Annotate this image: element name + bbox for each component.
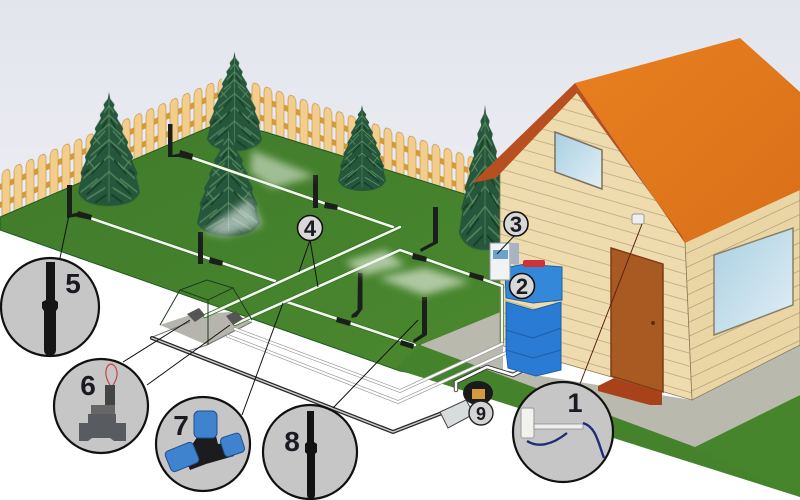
pipe: pump supply <box>152 338 442 432</box>
circle <box>263 405 357 499</box>
sprinkler body <box>42 262 58 356</box>
water tank <box>505 260 562 376</box>
circle <box>1 258 99 356</box>
control display <box>493 250 508 259</box>
tank tier three <box>506 328 561 358</box>
circle <box>156 397 250 491</box>
tree centre <box>197 125 260 236</box>
wall socket <box>632 214 644 224</box>
right cap <box>219 432 246 458</box>
tree behind house <box>459 105 511 250</box>
leader: 6 <box>123 320 230 385</box>
pipe: front lateral <box>90 218 275 281</box>
plate outline <box>150 322 252 352</box>
fitting body <box>184 436 234 470</box>
grass strip along the house <box>395 345 800 497</box>
badge 2: 2 <box>516 274 528 299</box>
lawn <box>0 126 560 400</box>
callout 6: valve <box>54 359 148 453</box>
tank tier four <box>506 348 561 376</box>
sprinklers and couplers <box>67 124 484 349</box>
leader: 8 <box>333 320 418 408</box>
sprinkler: centre <box>198 232 203 264</box>
pipe: main one <box>205 227 400 316</box>
top cap <box>194 411 217 438</box>
spray: right sprinkler <box>378 268 470 295</box>
roof: main plane <box>575 38 800 243</box>
pipe: tank to pump <box>456 367 523 390</box>
leader: 7 <box>242 303 283 415</box>
wire frame <box>160 280 252 345</box>
coupler: right rear <box>412 253 427 262</box>
pump housing <box>463 381 493 405</box>
red wire loop <box>106 364 117 385</box>
coupler: lower right <box>400 340 414 349</box>
door <box>611 248 663 392</box>
valve box base <box>150 312 252 352</box>
door knob <box>651 321 655 325</box>
leader: 4 <box>299 240 318 287</box>
window: side wall <box>714 228 793 335</box>
badge 9: 9 <box>476 404 486 424</box>
outlet box <box>521 408 534 438</box>
coupler: back right <box>324 202 338 210</box>
valves <box>187 308 243 325</box>
leader: 1 <box>580 224 642 384</box>
window: gable <box>555 132 602 189</box>
callout 8: sprinkler <box>263 405 357 499</box>
white tube <box>534 424 583 429</box>
pump <box>440 381 493 428</box>
wooden fence: right <box>250 81 474 202</box>
number: 7 <box>173 410 189 441</box>
leader lines <box>60 215 642 415</box>
sprinkler: back left <box>168 124 182 157</box>
pipe: buried one <box>235 329 502 391</box>
valve body <box>79 414 126 441</box>
water spray <box>203 150 470 295</box>
coupler: lower middle <box>336 317 351 326</box>
left cap <box>164 441 200 473</box>
sprinkler: right rear <box>420 207 438 252</box>
controller box <box>490 243 519 280</box>
tree back corner <box>207 52 262 151</box>
badge 4: 4 <box>304 216 317 241</box>
pump label <box>472 389 485 399</box>
tank tier one <box>505 264 562 303</box>
base plate <box>160 312 252 345</box>
callout 1: water inlet <box>513 382 613 482</box>
solenoid <box>105 385 115 409</box>
sprinkler body <box>305 411 317 499</box>
spray: centre sprinkler <box>203 198 262 236</box>
concrete path <box>420 311 800 447</box>
background: white ground <box>0 225 800 500</box>
background: sky <box>0 0 800 260</box>
badge 2 <box>510 274 534 299</box>
control back panel <box>510 243 519 264</box>
grass: lower right corner <box>690 395 800 497</box>
spray: lawn sprinkler <box>345 250 405 275</box>
sprinkler: left <box>67 185 80 218</box>
number: 8 <box>284 426 300 457</box>
house <box>472 38 800 405</box>
wall: right side <box>685 185 800 400</box>
badge 9 <box>469 401 493 425</box>
pipe: back lateral <box>193 158 393 227</box>
blue hose <box>527 423 604 458</box>
pipe: main two <box>235 250 502 342</box>
callout 5: sprinkler <box>1 258 99 356</box>
tree right <box>338 105 386 191</box>
leader: 5 <box>60 215 69 258</box>
callout 7: T fitting <box>156 397 250 491</box>
tree left <box>78 92 140 206</box>
door step <box>598 378 662 405</box>
badge 3 <box>504 212 528 237</box>
sprinkler: back right <box>313 175 318 208</box>
sprinkler: lower right <box>413 297 427 343</box>
wall: front gable <box>500 90 692 400</box>
pipe: buried two <box>228 336 508 402</box>
badge 4 <box>298 216 322 241</box>
number: 5 <box>65 268 81 299</box>
valve top <box>91 405 115 414</box>
number: 6 <box>80 370 96 401</box>
valve box frame <box>160 280 252 345</box>
coupler: back left <box>179 150 193 160</box>
badge 3: 3 <box>510 212 522 237</box>
tank tier two <box>506 302 561 338</box>
pipe: lower lateral <box>287 302 415 345</box>
roof: front edge <box>472 83 685 243</box>
wooden fence: left <box>0 78 222 217</box>
spray: back sprinkler <box>250 150 315 188</box>
leader: 3 <box>497 234 516 254</box>
coupler: near tank <box>469 272 484 281</box>
number: 1 <box>567 388 583 418</box>
sprinkler: lower middle <box>352 273 362 318</box>
control body <box>490 243 510 280</box>
pump motor <box>440 400 474 428</box>
pipes <box>90 158 523 432</box>
coupler: centre <box>209 257 223 266</box>
tank cap <box>523 260 545 267</box>
circle <box>513 382 613 482</box>
circle <box>54 359 148 453</box>
coupler: left <box>77 211 92 220</box>
